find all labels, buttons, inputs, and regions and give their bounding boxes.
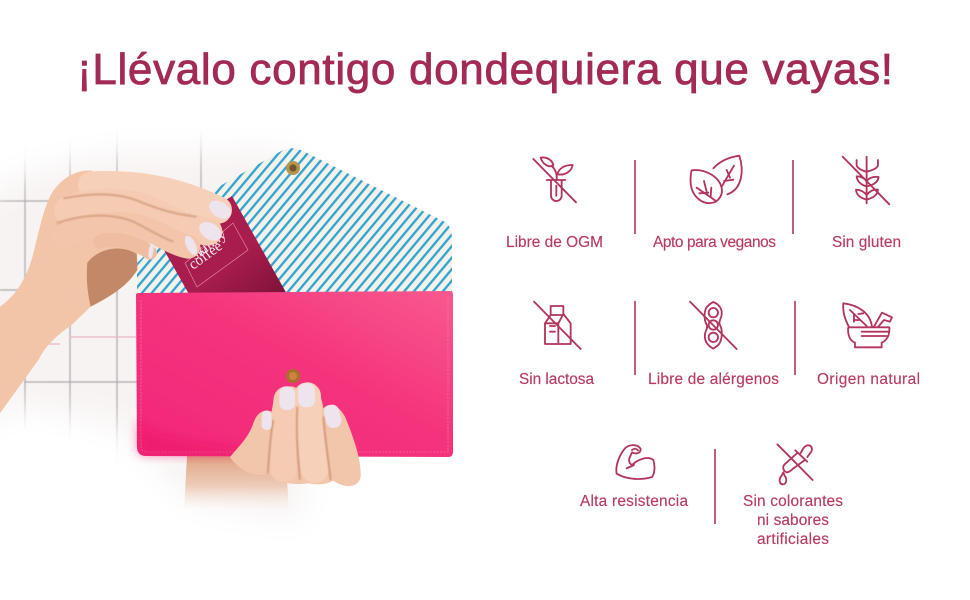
label: Origen natural: Origen natural [817, 371, 920, 388]
label: Sin lactosa: Sin lactosa [519, 371, 594, 388]
label: Alta resistencia: Alta resistencia [580, 493, 688, 510]
sachet: skinny [188, 226, 230, 263]
label: Sin colorantes ni sabores artificiales: Sin colorantes [743, 493, 843, 510]
label: Libre de OGM: Libre de OGM [506, 234, 603, 251]
icon: no GMO [533, 157, 576, 202]
flap: striped lining [137, 148, 452, 293]
icon: no allergens [690, 302, 737, 349]
label: Apto para veganos: Apto para veganos [653, 234, 776, 251]
label: Libre de alérgenos: Libre de alérgenos [648, 371, 779, 388]
fingernails [148, 197, 234, 259]
lower arm behind pouch [184, 456, 288, 510]
pink pouch [136, 291, 453, 457]
palm and wrist [0, 171, 150, 413]
flap snap [286, 161, 300, 175]
icon: no lactose [534, 302, 581, 349]
sachet: coffee [186, 238, 226, 273]
icon: no gluten [843, 157, 889, 204]
icon: natural origin [843, 303, 892, 347]
lower hand [230, 383, 361, 486]
fingernails [262, 383, 343, 430]
sachet [160, 196, 288, 296]
label: Sin colorantes ni sabores artificiales: ni sabores [757, 512, 829, 529]
label: Sin gluten: Sin gluten [832, 234, 901, 251]
title: ¡Llévalo contigo dondequiera que vayas! [77, 45, 893, 94]
upper hand [0, 171, 234, 413]
icon: vegan leaves [691, 156, 742, 203]
background: blurred grid shirt [0, 136, 297, 508]
label: Sin colorantes ni sabores artificiales [743, 493, 843, 548]
icon: strength arm [616, 445, 654, 479]
pouch snap [286, 369, 300, 383]
fingers [63, 185, 218, 253]
icon: no colorants dropper [777, 444, 813, 484]
shadow between thumb and palm [87, 249, 137, 307]
label: Sin colorantes ni sabores artificiales: artificiales [757, 531, 829, 548]
photo: hands with pouch and sachet [0, 136, 453, 510]
